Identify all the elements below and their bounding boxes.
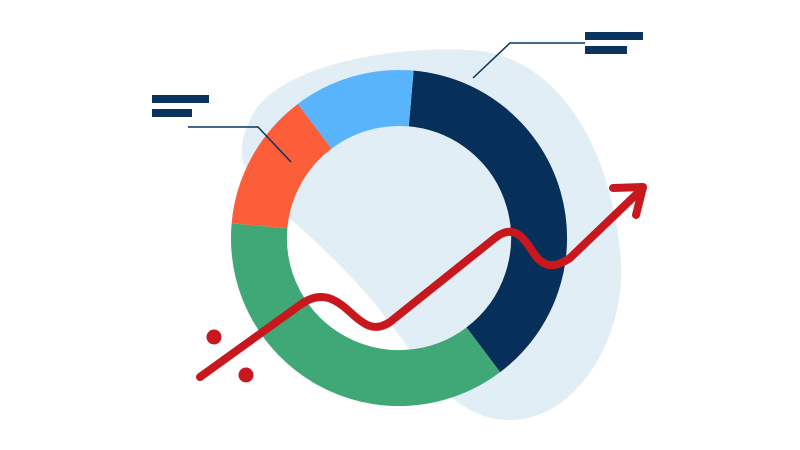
label: left xyxy=(152,95,291,162)
segment: green xyxy=(259,226,483,378)
icon: percent dots xyxy=(206,330,254,382)
segment: light blue xyxy=(315,98,411,126)
background blob xyxy=(242,49,621,420)
label: top right xyxy=(473,32,643,78)
donut chart xyxy=(259,98,539,378)
trend arrow xyxy=(200,187,643,377)
segment: orange xyxy=(260,126,315,226)
segment: navy xyxy=(411,98,539,350)
